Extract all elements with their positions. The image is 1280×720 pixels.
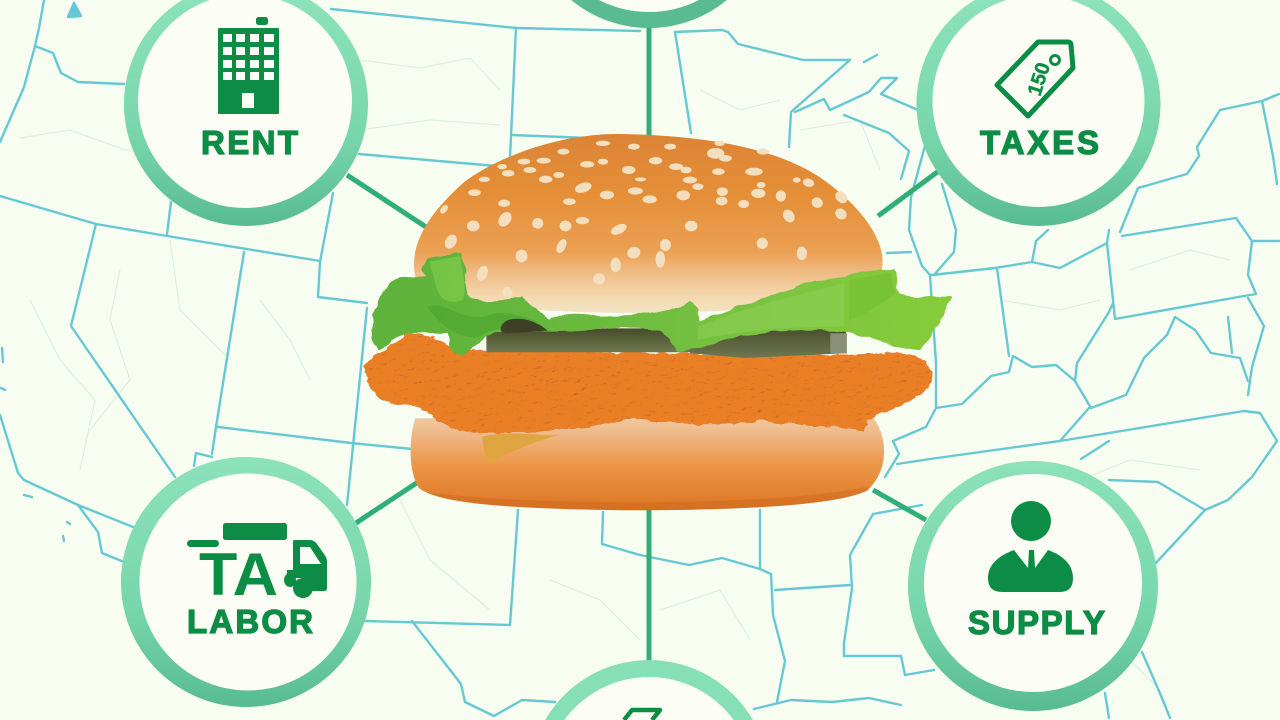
panel: rent	[124, 0, 368, 226]
icon: delivery truck: TA	[199, 541, 278, 608]
panel: labor	[121, 457, 371, 707]
icon: person with tie	[988, 501, 1073, 592]
icon: price tag: 150	[1024, 60, 1055, 99]
burger illustration	[364, 134, 951, 510]
label: RENT: RENT	[201, 124, 298, 161]
icon: price tag	[997, 42, 1073, 116]
pickle shadow	[501, 319, 548, 333]
sauce	[482, 434, 560, 463]
label: TAXES: TAXES	[980, 124, 1099, 161]
connector lines	[347, 20, 940, 662]
bottom bun	[411, 418, 884, 510]
crispy chicken patty	[364, 333, 933, 433]
label: SUPPLY: SUPPLY	[968, 604, 1105, 641]
pickles	[486, 327, 847, 358]
panel: supply	[908, 461, 1158, 711]
top bun	[414, 134, 883, 313]
icon: office building	[218, 17, 279, 114]
label: LABOR: LABOR	[187, 603, 313, 640]
panel: bottom circle (cropped)	[545, 660, 753, 720]
panel: taxes	[917, 0, 1160, 226]
panel: top circle (cropped)	[571, 0, 727, 28]
lettuce	[371, 254, 951, 354]
sesame seeds	[439, 141, 850, 298]
icon: delivery truck	[187, 523, 327, 608]
icon: leaf (cropped)	[624, 710, 660, 720]
